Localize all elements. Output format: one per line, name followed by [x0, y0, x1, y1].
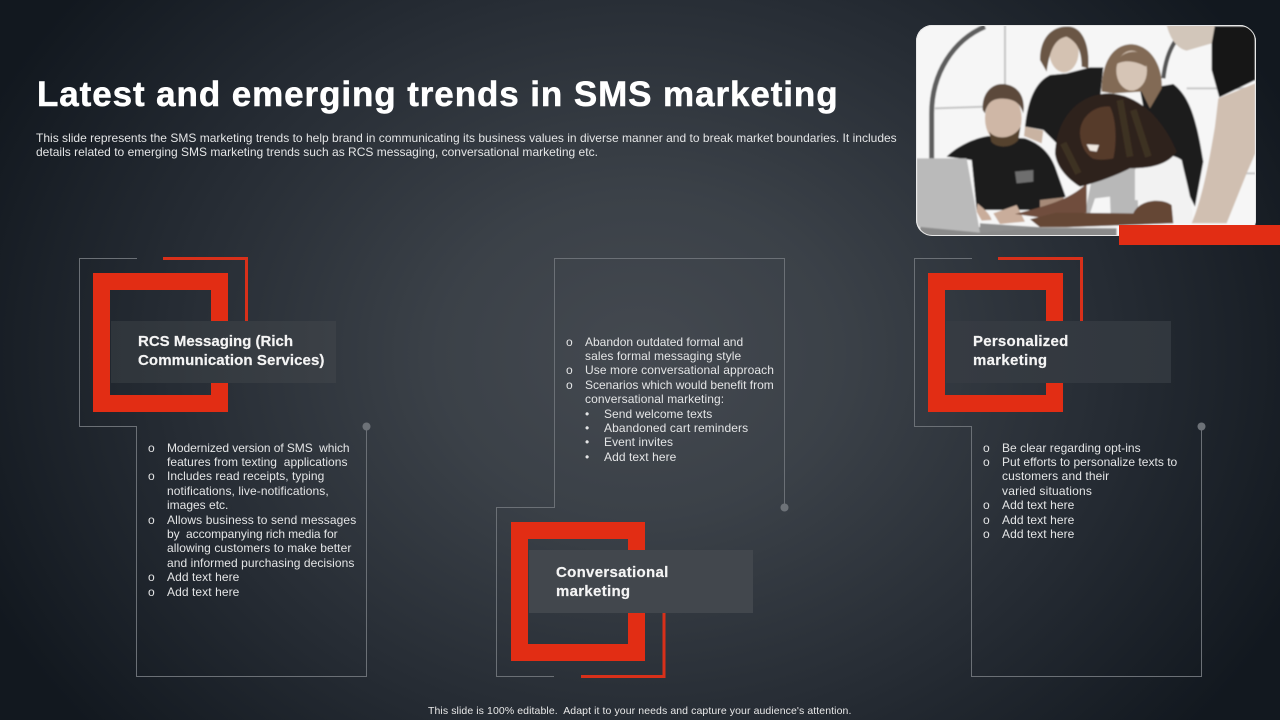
text block: conversational bullets: Scenarios which would benefit from — [585, 378, 774, 392]
text block: RCS bullets: notifications, live-notifications, — [167, 484, 329, 498]
photo: team around a laptop — [916, 25, 1256, 236]
text block: personalized bullets: varied situations — [1002, 484, 1092, 498]
text block: RCS bullets: o — [148, 570, 155, 584]
text block: personalized bullets: Add text here — [1002, 513, 1074, 527]
text block: RCS bullets: by accompanying rich media for — [167, 527, 338, 541]
text block: conversational bullets: o — [566, 363, 573, 377]
heading: personalized marketing: Personalized — [973, 333, 1069, 350]
woman with glasses — [1140, 84, 1203, 207]
standing man — [1025, 67, 1103, 150]
panel: personalized marketing — [914, 257, 1206, 677]
text block: RCS bullets: allowing customers to make better — [167, 541, 351, 555]
heading: RCS messaging: Communication Services) — [138, 352, 325, 369]
text block: RCS bullets: o — [148, 469, 155, 483]
footer note: This slide is 100% editable. Adapt it to your needs and capture your audience's attention. — [428, 705, 851, 717]
text block: RCS bullets: images etc. — [167, 498, 228, 512]
text block: personalized bullets: Be clear regarding opt-ins — [1002, 441, 1141, 455]
text block: RCS bullets: Includes read receipts, typing — [167, 469, 324, 483]
text block: RCS bullets: features from texting applications — [167, 455, 347, 469]
heading: personalized marketing: marketing — [973, 352, 1047, 369]
description text: This slide represents the SMS marketing trends to help brand in communicating its business values in diverse manner and to break market boundaries. It includes — [36, 131, 897, 145]
panel: conversational marketing — [496, 258, 788, 678]
heading: RCS messaging: RCS Messaging (Rich — [138, 333, 293, 350]
panel: RCS messaging — [79, 257, 370, 677]
title: Latest and emerging trends in SMS marketing — [37, 75, 839, 114]
text block: RCS bullets: Add text here — [167, 585, 239, 599]
text block: personalized bullets: o — [983, 441, 990, 455]
heading: conversational marketing: marketing — [556, 583, 630, 600]
text block: conversational bullets: Event invites — [604, 435, 673, 449]
description text: details related to emerging SMS marketing trends such as RCS messaging, conversational marketing etc. — [36, 145, 598, 159]
seated man — [947, 136, 1066, 210]
text block: personalized bullets: Add text here — [1002, 527, 1074, 541]
red accent bar — [1119, 225, 1280, 245]
text block: conversational bullets: sales formal messaging style — [585, 349, 741, 363]
text block: conversational bullets: o — [566, 335, 573, 349]
text block: conversational bullets: • — [585, 450, 589, 464]
text block: conversational bullets: Send welcome texts — [604, 407, 712, 421]
text block: RCS bullets: o — [148, 441, 155, 455]
text block: personalized bullets — [983, 441, 1177, 541]
text block: personalized bullets: o — [983, 513, 990, 527]
text block: RCS bullets: and informed purchasing decisions — [167, 556, 354, 570]
text block: RCS bullets: o — [148, 513, 155, 527]
text block: conversational bullets: Add text here — [604, 450, 676, 464]
text block: personalized bullets: customers and their — [1002, 469, 1109, 483]
centre woman body — [1085, 167, 1138, 213]
text block: conversational bullets: Use more conversational approach — [585, 363, 774, 377]
right standing person — [1212, 26, 1255, 97]
heading: RCS messaging — [111, 321, 336, 383]
heading: conversational marketing — [529, 550, 753, 613]
heading: conversational marketing: Conversational — [556, 564, 669, 581]
text block: RCS bullets: Allows business to send messages — [167, 513, 356, 527]
text block: personalized bullets: o — [983, 527, 990, 541]
text block: RCS bullets: Modernized version of SMS which — [167, 441, 350, 455]
text block: RCS bullets: o — [148, 585, 155, 599]
text block: conversational bullets: • — [585, 435, 589, 449]
heading: personalized marketing — [946, 321, 1171, 383]
text block: RCS bullets: Add text here — [167, 570, 239, 584]
text block: conversational bullets: Abandoned cart reminders — [604, 421, 748, 435]
description text — [36, 131, 897, 159]
table and laptop — [920, 227, 1117, 237]
text block: conversational bullets: conversational marketing: — [585, 392, 724, 406]
text block: personalized bullets: Add text here — [1002, 498, 1074, 512]
text block: personalized bullets: o — [983, 498, 990, 512]
text block: personalized bullets: Put efforts to personalize texts to — [1002, 455, 1177, 469]
text block: conversational bullets: • — [585, 407, 589, 421]
text block: conversational bullets: o — [566, 378, 573, 392]
text block: conversational bullets: • — [585, 421, 589, 435]
text block: personalized bullets: o — [983, 455, 990, 469]
text block: RCS bullets — [148, 441, 356, 599]
text block: conversational bullets — [566, 335, 774, 464]
text block: conversational bullets: Abandon outdated formal and — [585, 335, 743, 349]
centre woman hair — [1055, 93, 1177, 187]
